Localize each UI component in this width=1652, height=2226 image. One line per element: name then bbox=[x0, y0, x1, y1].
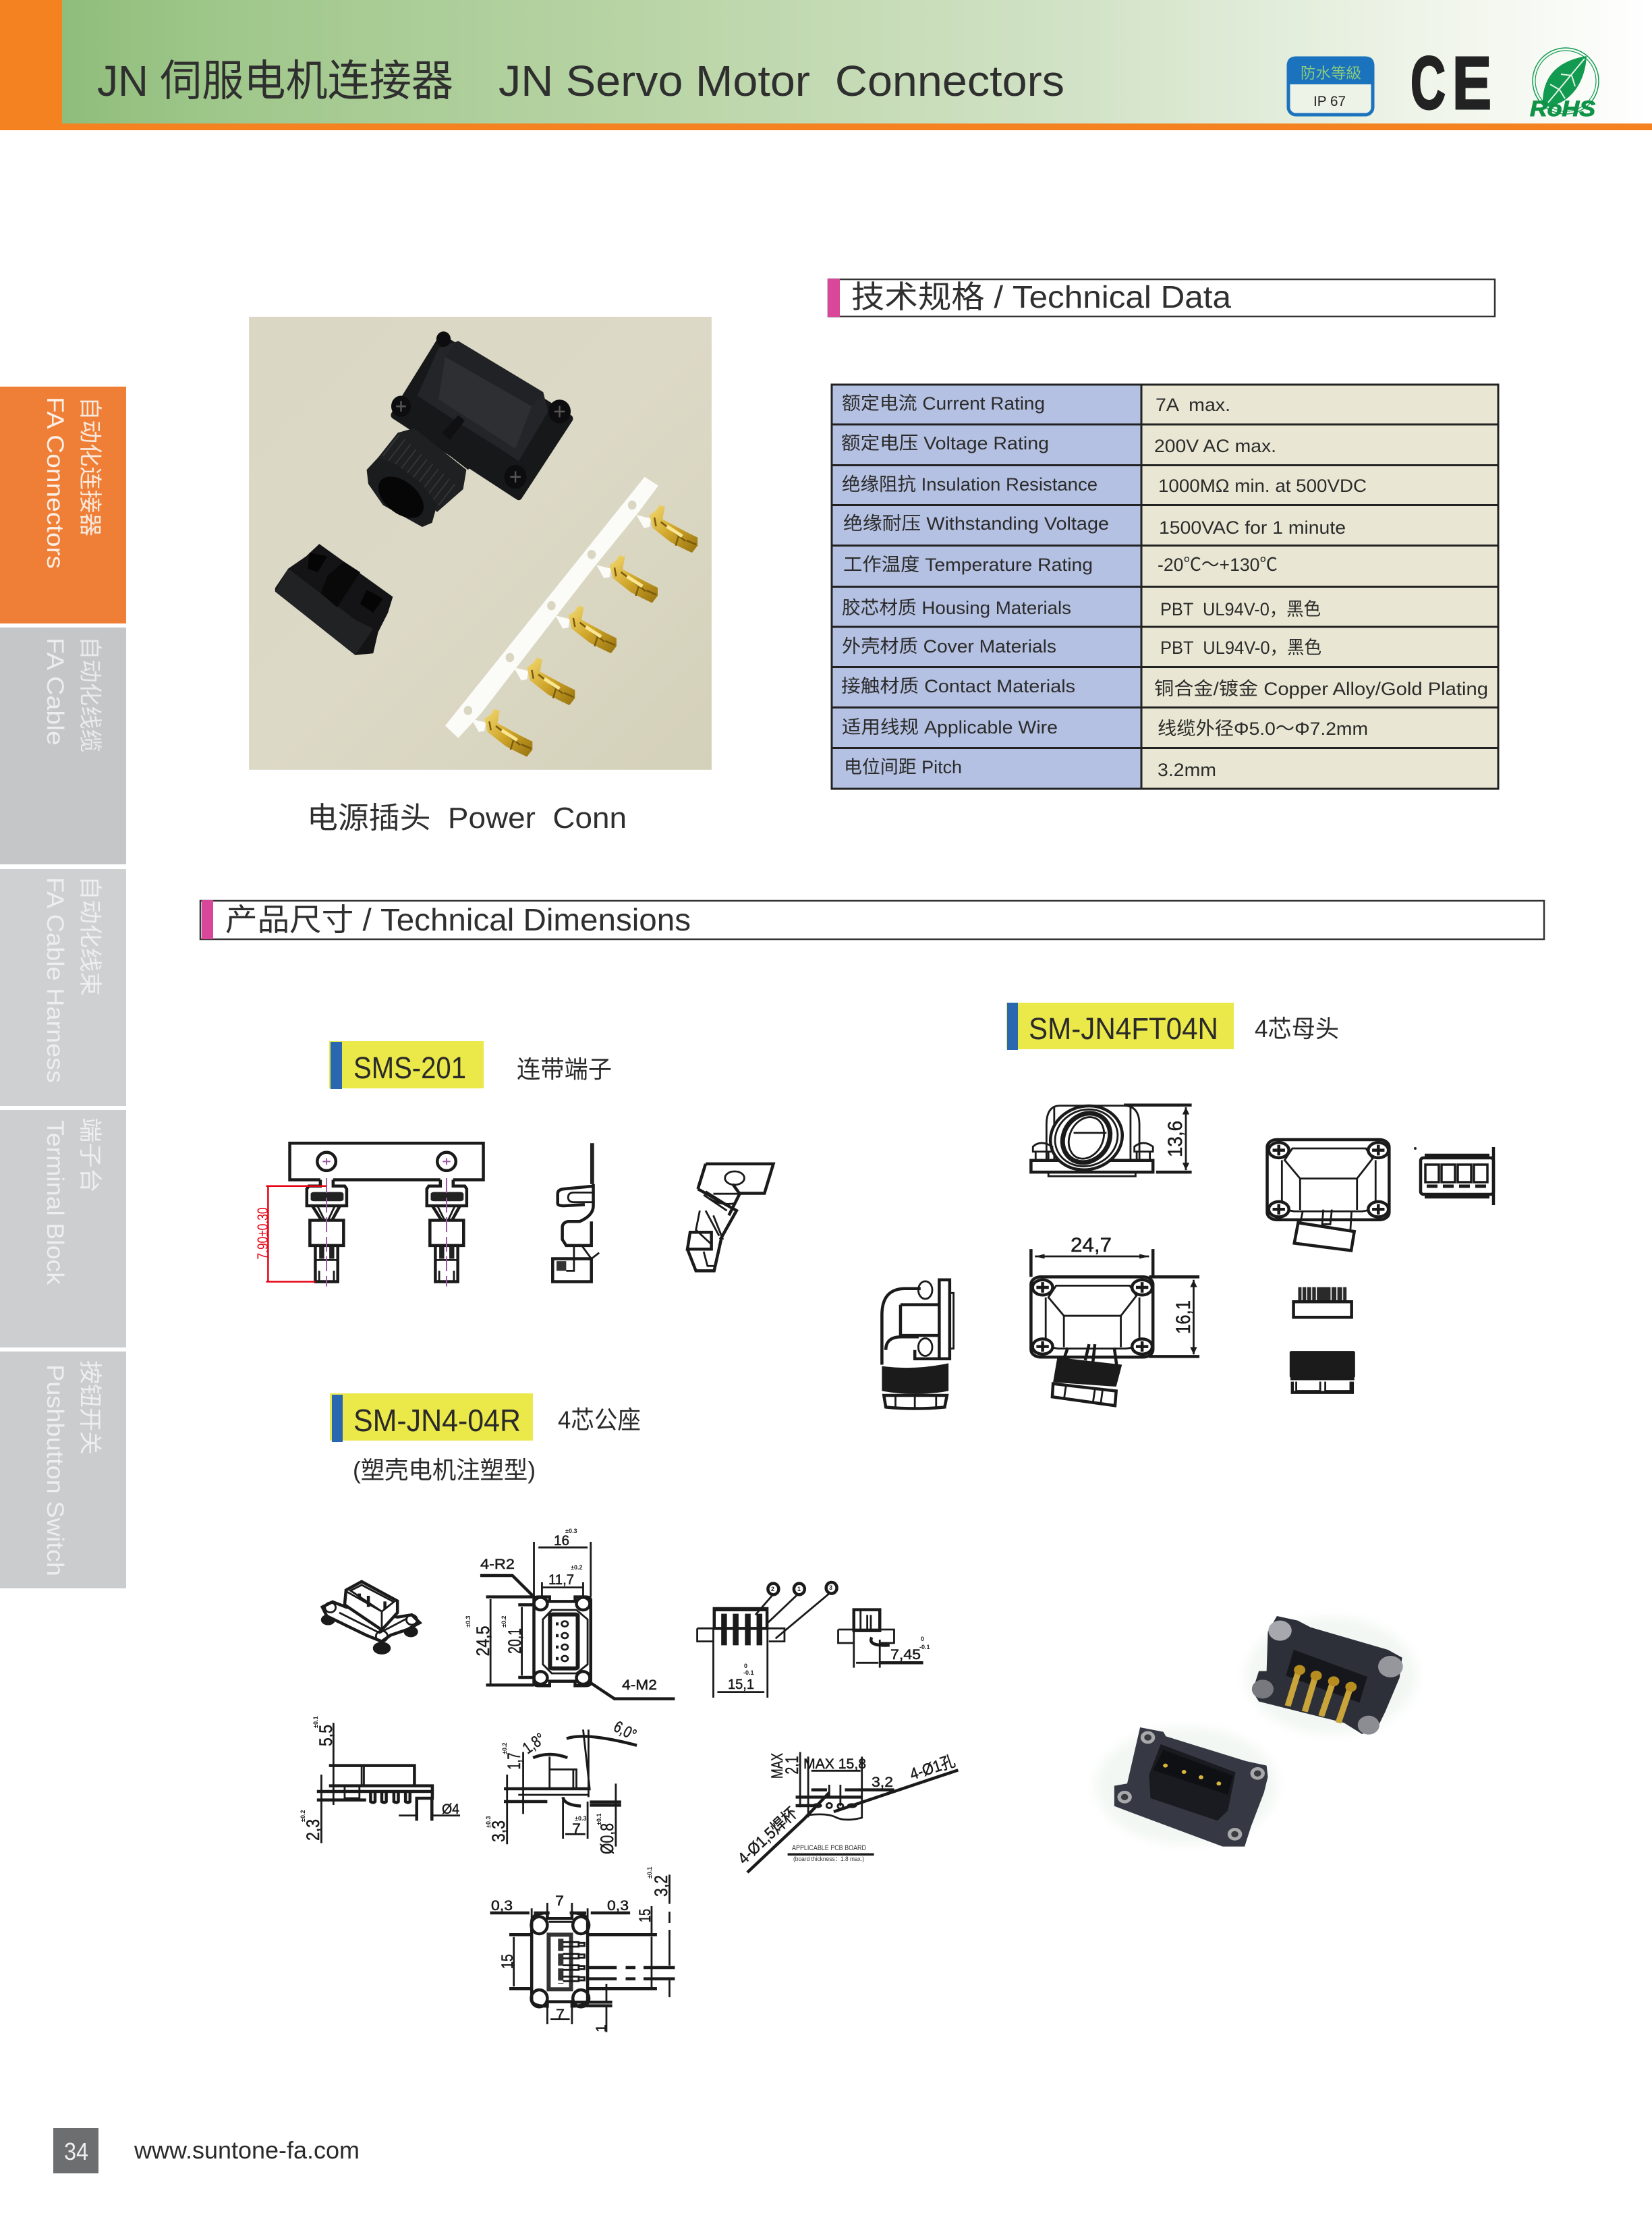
row labels: 绝缘耐压 Withstanding Voltage bbox=[843, 513, 1109, 534]
rear connector bbox=[1252, 1616, 1403, 1735]
bottom view bbox=[490, 1874, 675, 2032]
row labels: 外壳材质 Cover Materials bbox=[842, 636, 1056, 657]
tolerance labels: ±0.2 bbox=[501, 1743, 508, 1754]
tolerance labels: -0.1 bbox=[919, 1644, 930, 1650]
isometric view bbox=[687, 1164, 773, 1271]
side view bbox=[882, 1280, 954, 1409]
footer: website: www.suntone-fa.com bbox=[134, 2136, 360, 2164]
tolerance labels: ±0.1 bbox=[596, 1814, 602, 1825]
row labels: 适用线规 Applicable Wire bbox=[842, 717, 1058, 738]
dimension labels: 11,7 bbox=[548, 1572, 574, 1588]
carrier strip front view bbox=[290, 1143, 484, 1287]
row labels bbox=[841, 393, 1109, 777]
icon: RoHS leaf bbox=[1530, 48, 1599, 121]
dimension labels: 24,7 bbox=[1071, 1234, 1112, 1256]
title: JN Servo Motor Connectors bbox=[499, 57, 1064, 105]
dimension labels bbox=[1071, 1121, 1195, 1334]
top housing view B with dimensions bbox=[1031, 1249, 1199, 1406]
tolerance labels: ±0.3 bbox=[575, 1815, 586, 1822]
PCB note bbox=[792, 1844, 866, 1862]
table: technical data bbox=[832, 385, 1498, 789]
tab: Pushbutton Switch bbox=[0, 1352, 126, 1588]
gold terminals bbox=[472, 505, 697, 756]
tab: FA Cable: FA Cable bbox=[42, 638, 68, 746]
tolerance labels: ±0.3 bbox=[565, 1528, 577, 1534]
footer: page number: 34 bbox=[64, 2138, 88, 2165]
dimension labels: 7 bbox=[572, 1821, 581, 1837]
dimension labels: 15,1 bbox=[728, 1677, 754, 1692]
dimension labels: Ø4 bbox=[442, 1802, 459, 1817]
dimension labels: 4-Ø1孔 bbox=[908, 1752, 957, 1784]
end view bbox=[1031, 1101, 1192, 1176]
housing bbox=[367, 331, 571, 527]
footer: page number bbox=[53, 2128, 98, 2173]
dimension labels: 20,1 bbox=[505, 1628, 525, 1654]
tab: Pushbutton Switch: 按钮开关 bbox=[77, 1360, 103, 1455]
dimension labels: 1,8° bbox=[519, 1729, 548, 1758]
row values bbox=[1154, 395, 1488, 780]
dimension labels: 16 bbox=[554, 1533, 569, 1549]
side view bbox=[552, 1143, 599, 1281]
balloon numbers: 3 bbox=[829, 1584, 832, 1591]
dimension labels: 4-Ø1,5焊杯 bbox=[735, 1804, 801, 1868]
tab: Pushbutton Switch: Pushbutton Switch bbox=[42, 1364, 68, 1576]
drawing: SM-JN4-04R upper views bbox=[321, 1528, 930, 1699]
dimension labels: Ø0,8 bbox=[597, 1823, 617, 1854]
tolerance labels: 0 bbox=[921, 1636, 924, 1642]
PCB note: APPLICABLE PCB BOARD bbox=[792, 1844, 866, 1852]
label: SMS-201: SMS-201 bbox=[353, 1051, 466, 1085]
gland views bbox=[1290, 1287, 1355, 1393]
tolerance labels: ±0.1 bbox=[646, 1867, 653, 1879]
icon: CE mark bbox=[1411, 42, 1491, 125]
icon: IP67 waterproof badge: IP 67 bbox=[1313, 94, 1346, 109]
dimension labels: 24,5 bbox=[473, 1626, 493, 1656]
tolerance labels bbox=[465, 1528, 930, 1676]
row values: 7A max. bbox=[1156, 395, 1230, 415]
header band bbox=[0, 0, 1652, 130]
title: JN 伺服电机连接器 bbox=[97, 57, 453, 105]
dimension labels: 13,6 bbox=[1164, 1121, 1187, 1157]
dimension labels: 0,3 bbox=[607, 1898, 629, 1914]
dimension labels: 2,1 bbox=[782, 1756, 802, 1775]
tolerance labels bbox=[300, 1717, 653, 1879]
tab: FA Cable Harness bbox=[0, 869, 126, 1106]
tolerance labels: ±0.1 bbox=[312, 1717, 319, 1728]
dimension labels bbox=[473, 1533, 921, 1693]
dimension labels: 16,1 bbox=[1172, 1300, 1195, 1334]
row labels: 额定电压 Voltage Rating bbox=[841, 433, 1049, 453]
side view left bbox=[317, 1723, 460, 1843]
row values: 200V AC max. bbox=[1154, 436, 1276, 456]
row labels: 工作温度 Temperature Rating bbox=[843, 555, 1093, 575]
row values: PBT UL94V-0，黑色 bbox=[1160, 638, 1321, 658]
dimension labels: 15 bbox=[499, 1954, 517, 1969]
tolerance labels: ±0.2 bbox=[300, 1810, 306, 1822]
drawing: SM-JN4-04R lower views bbox=[300, 1717, 958, 2032]
row values: 3.2mm bbox=[1158, 760, 1216, 780]
heading: Technical Data bbox=[828, 279, 1495, 317]
tab: Terminal Block bbox=[0, 1110, 126, 1347]
row values: 铜合金/镀金 Copper Alloy/Gold Plating bbox=[1154, 679, 1488, 699]
label: SM-JN4FT04N bbox=[1006, 1003, 1339, 1050]
row values: 1000MΩ min. at 500VDC bbox=[1158, 476, 1367, 496]
dimension labels: 4-M2 bbox=[622, 1677, 657, 1693]
dimension label: 7.90±0.30 bbox=[254, 1208, 271, 1259]
tab: FA Cable bbox=[0, 628, 126, 864]
section view with balloons bbox=[697, 1582, 837, 1698]
label: SM-JN4FT04N: 4芯母头 bbox=[1255, 1015, 1339, 1042]
dimension labels: 5,5 bbox=[316, 1725, 336, 1746]
balloon numbers bbox=[771, 1584, 832, 1592]
dimension labels: 3,3 bbox=[488, 1820, 509, 1842]
drawing: SMS-201 terminal bbox=[254, 1143, 773, 1287]
tab: FA Connectors: FA Connectors bbox=[42, 397, 68, 569]
dimension labels: 4-R2 bbox=[480, 1557, 515, 1572]
row values: 1500VAC for 1 minute bbox=[1159, 518, 1346, 538]
tab: FA Connectors bbox=[0, 387, 126, 623]
dimension labels bbox=[303, 1717, 957, 2032]
tab: FA Cable: 自动化线缆 bbox=[77, 636, 103, 752]
isometric view bbox=[321, 1582, 420, 1654]
side section view bbox=[838, 1610, 923, 1668]
icon: CE mark: E bbox=[1452, 42, 1491, 125]
dimension labels: 0,3 bbox=[491, 1898, 513, 1914]
dimension labels: 7,45 bbox=[890, 1647, 921, 1663]
heading: Technical Data: 技术规格 / Technical Data bbox=[851, 279, 1231, 314]
PCB note: (board thickness：1.8 max.) bbox=[793, 1856, 864, 1862]
drawing: SM-JN4FT04N connector bbox=[882, 1101, 1493, 1409]
dimension labels: 3,2 bbox=[651, 1875, 671, 1897]
carrier strip bbox=[445, 477, 658, 738]
balloon numbers: 2 bbox=[771, 1586, 774, 1592]
label: SM-JN4-04R: 4芯公座 bbox=[558, 1406, 641, 1434]
tolerance labels: -0.1 bbox=[743, 1669, 754, 1676]
front connector bbox=[1114, 1727, 1268, 1847]
row labels: 接触材质 Contact Materials bbox=[841, 676, 1075, 696]
dimension labels: MAX bbox=[768, 1753, 787, 1779]
photo: SM-JN4-04R connectors bbox=[1096, 1616, 1417, 1847]
side view centre bbox=[504, 1729, 637, 1847]
row values: PBT UL94V-0，黑色 bbox=[1160, 599, 1321, 619]
label: SM-JN4FT04N: SM-JN4FT04N bbox=[1029, 1011, 1218, 1046]
caption: Power Conn: 电源插头 Power Conn bbox=[307, 802, 627, 835]
heading: Technical Dimensions: 产品尺寸 / Technical Dimensions bbox=[225, 902, 691, 937]
side navigation tabs bbox=[0, 387, 126, 1588]
photo: power connector parts bbox=[249, 317, 712, 770]
tolerance labels: ±0.2 bbox=[501, 1616, 507, 1627]
front view bbox=[480, 1542, 675, 1699]
dimension labels: 1 bbox=[594, 2024, 609, 2032]
tab: Terminal Block: Terminal Block bbox=[42, 1120, 68, 1285]
dimension: 7.90 bbox=[266, 1186, 326, 1281]
icon: RoHS leaf: RoHS bbox=[1530, 96, 1596, 121]
dimension labels: 3,2 bbox=[872, 1775, 893, 1790]
top housing view A bbox=[1268, 1140, 1389, 1250]
rear connector face bbox=[1414, 1147, 1493, 1205]
tab: FA Cable Harness: FA Cable Harness bbox=[42, 877, 68, 1083]
label: SMS-201 bbox=[329, 1041, 612, 1089]
icon: CE mark: C bbox=[1411, 42, 1446, 125]
label: SMS-201: 连带端子 bbox=[517, 1055, 612, 1083]
dimension labels: 7 bbox=[556, 2007, 565, 2022]
tolerance labels: 0 bbox=[744, 1663, 747, 1669]
row values: 线缆外径Φ5.0～Φ7.2mm bbox=[1158, 719, 1368, 739]
row labels: 绝缘阻抗 Insulation Resistance bbox=[842, 474, 1098, 495]
tolerance labels: ±0.2 bbox=[571, 1564, 582, 1571]
dimension labels: 2,3 bbox=[303, 1819, 323, 1841]
label: SM-JN4-04R bbox=[330, 1393, 641, 1484]
label: SM-JN4-04R: SM-JN4-04R bbox=[353, 1403, 521, 1438]
icon: IP67 waterproof badge: 防水等級 bbox=[1301, 65, 1361, 82]
dimension labels: 15 bbox=[636, 1909, 654, 1922]
title bbox=[97, 57, 1064, 105]
dimension labels: MAX 15,8 bbox=[803, 1756, 866, 1772]
tab: FA Cable Harness: 自动化线束 bbox=[77, 876, 103, 996]
tab: Terminal Block: 端子台 bbox=[77, 1117, 103, 1193]
label: SM-JN4-04R: (塑壳电机注塑型) bbox=[353, 1456, 536, 1484]
heading: Technical Dimensions bbox=[200, 900, 1544, 939]
dimension labels: 1,7 bbox=[504, 1753, 524, 1769]
insert bbox=[275, 544, 393, 655]
tolerance labels: ±0.3 bbox=[465, 1616, 472, 1627]
balloon numbers: 1 bbox=[797, 1586, 801, 1592]
dimension labels: 6,0° bbox=[610, 1717, 639, 1744]
row labels: 胶芯材质 Housing Materials bbox=[842, 598, 1071, 618]
row labels: 额定电流 Current Rating bbox=[842, 393, 1045, 414]
row labels: 电位间距 Pitch bbox=[844, 757, 962, 777]
dimension labels: 7 bbox=[555, 1893, 564, 1909]
icon: IP67 waterproof badge bbox=[1287, 57, 1374, 115]
PCB layout bbox=[747, 1752, 958, 1872]
tab: FA Connectors: 自动化连接器 bbox=[77, 397, 103, 536]
row values: -20℃～+130℃ bbox=[1158, 555, 1278, 575]
tolerance labels: ±0.3 bbox=[485, 1816, 492, 1828]
